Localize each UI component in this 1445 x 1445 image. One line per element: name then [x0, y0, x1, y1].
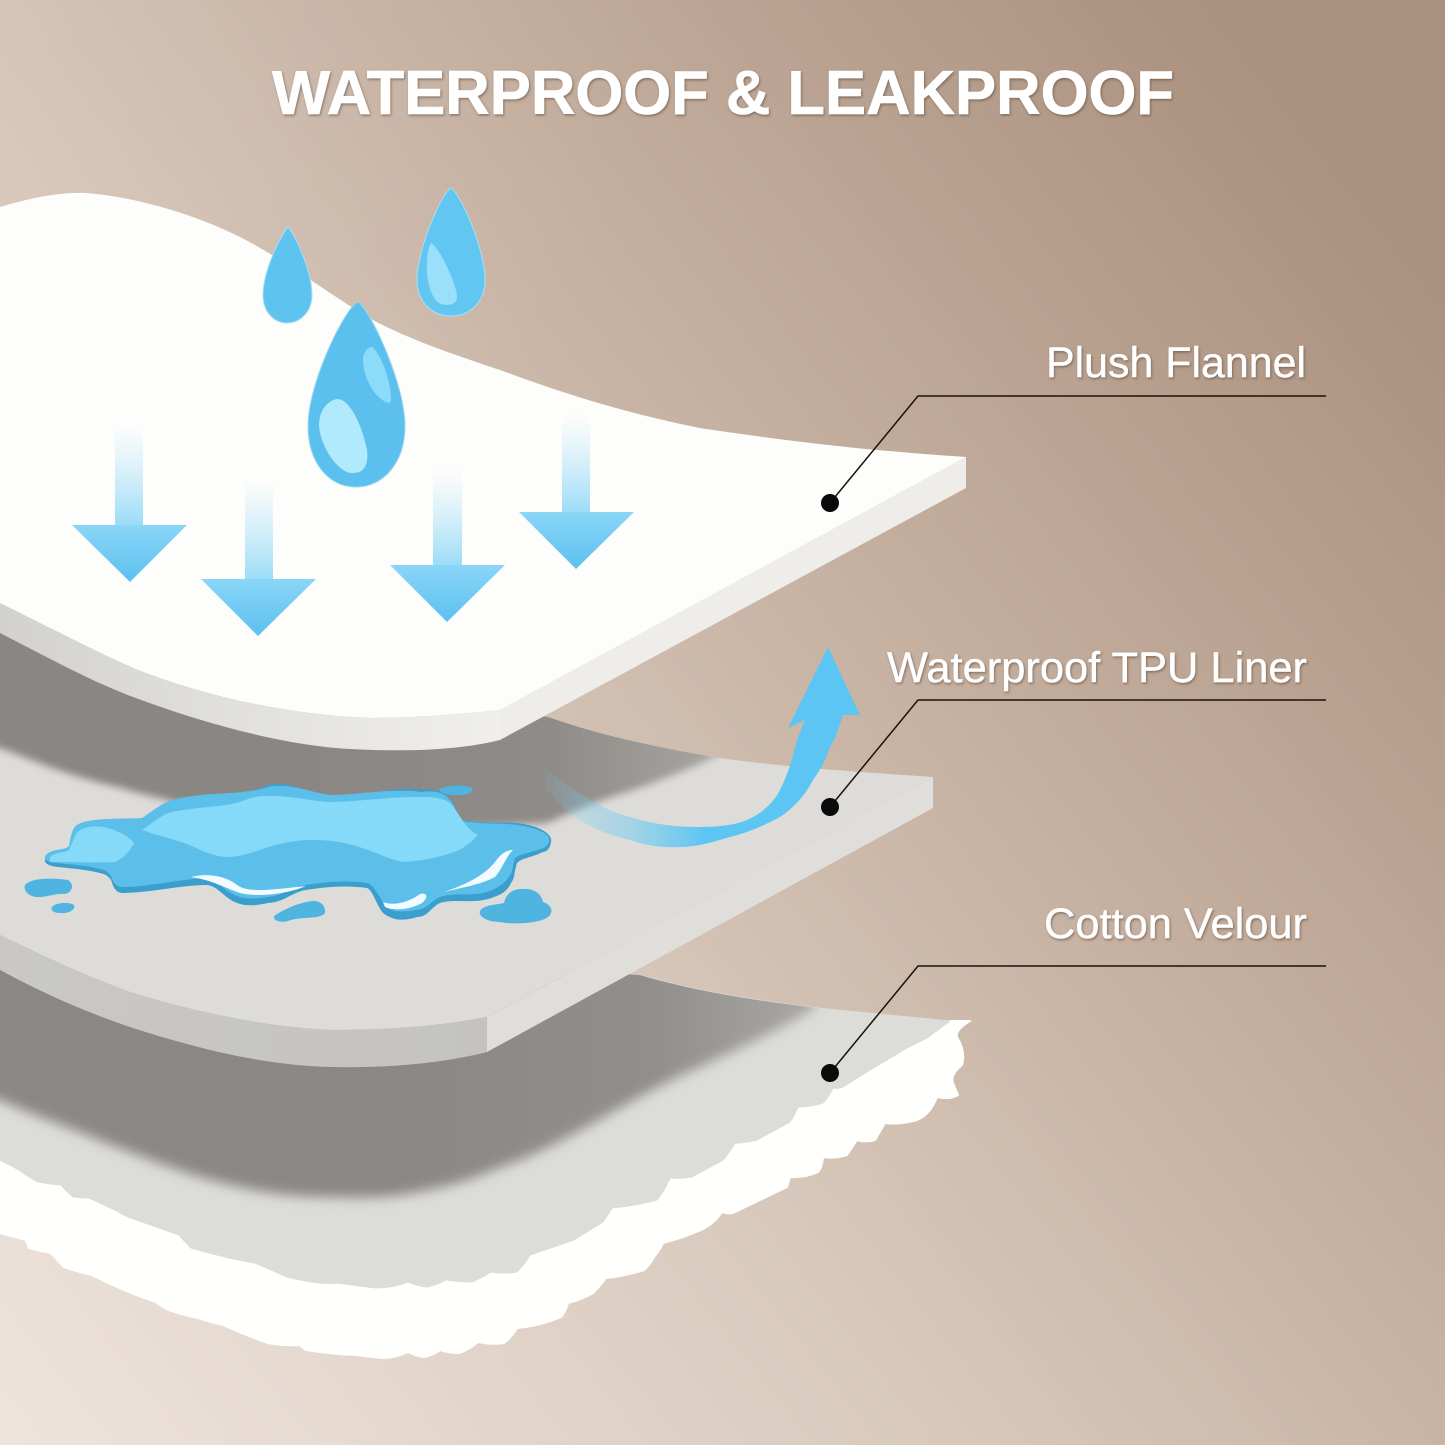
cast shadow on liner [0, 630, 719, 828]
puddle outer edge [45, 784, 551, 920]
layer: waterproof TPU liner [0, 600, 933, 1067]
label: cotton velour [821, 900, 1326, 1082]
liner front side edge [0, 935, 487, 1067]
arrow 2 [201, 480, 316, 636]
leader line [830, 396, 1326, 503]
layer: plush flannel [0, 193, 966, 750]
layer: cotton velour [0, 900, 970, 1358]
right drop [417, 188, 485, 316]
large drop [308, 302, 405, 487]
flannel top surface [0, 193, 966, 718]
dot [821, 1064, 839, 1082]
liner top surface [0, 620, 933, 1030]
liner right side edge [487, 777, 933, 1052]
label: cotton velour: Cotton Velour [1044, 900, 1307, 948]
label: plush flannel [821, 339, 1326, 512]
leader line [830, 700, 1326, 807]
arrow 4 [519, 415, 634, 569]
puddle highlight centre [142, 796, 478, 862]
puddle highlight left [50, 826, 134, 862]
white velour pile edge [0, 1021, 970, 1358]
puddle white glints [191, 850, 513, 909]
leader line [830, 966, 1326, 1073]
puddle body [45, 786, 549, 911]
title: WATERPROOF & LEAKPROOF [272, 59, 1174, 128]
water drops [263, 188, 485, 487]
flannel right side edge [500, 457, 966, 740]
down arrows [72, 415, 634, 636]
velour grey top surface [0, 945, 950, 1288]
label: plush flannel: Plush Flannel [1046, 339, 1306, 387]
curved arrow out of puddle [542, 647, 860, 847]
label: waterproof TPU liner [821, 644, 1326, 816]
cast shadow on velour [0, 900, 817, 1198]
water puddle [25, 784, 551, 923]
flannel front side edge [0, 603, 500, 750]
dot [821, 798, 839, 816]
dot [821, 494, 839, 512]
arrow 3 [390, 470, 505, 622]
arrow 1 [72, 425, 187, 582]
label: waterproof TPU liner: Waterproof TPU Liner [887, 644, 1307, 692]
small drop [263, 227, 312, 323]
puddle splash droplets [25, 785, 551, 923]
